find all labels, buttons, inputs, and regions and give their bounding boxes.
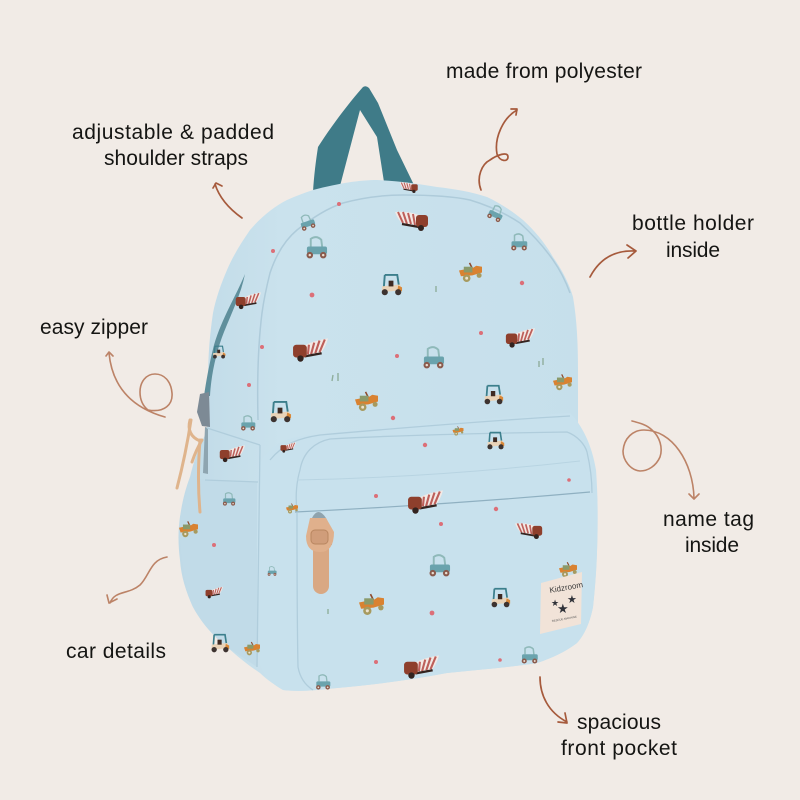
arrow: to polyester — [479, 109, 517, 190]
vehicle print — [179, 183, 577, 690]
brand label: Kidzroom — [549, 580, 584, 595]
label: adjustable and padded shoulder straps: adjustable & padded — [72, 121, 274, 144]
arrow: to front pocket — [540, 677, 567, 723]
label: name tag inside: name tag — [663, 508, 754, 531]
main zipper strip — [204, 274, 245, 396]
label: adjustable and padded shoulder straps — [72, 121, 274, 170]
label: bottle holder inside — [632, 212, 754, 262]
pocket zipper line — [295, 492, 590, 512]
label: bottle holder inside: bottle holder — [632, 212, 754, 235]
front pocket — [257, 413, 598, 691]
label: name tag inside — [663, 508, 754, 557]
backpack illustration — [177, 86, 598, 691]
brand label — [540, 572, 584, 634]
brand label: ★ — [557, 602, 569, 617]
label: easy zipper: easy zipper — [40, 316, 148, 339]
side pocket shading — [180, 477, 257, 667]
side pocket seams — [205, 428, 260, 667]
label: spacious front pocket: front pocket — [561, 737, 677, 760]
brand label: ★ — [551, 599, 559, 609]
label: spacious front pocket — [561, 711, 677, 760]
zipper gap shadow — [203, 427, 208, 474]
print dots — [212, 202, 571, 664]
arrow: to easy zipper — [106, 352, 172, 417]
arrow: to bottle holder — [590, 245, 636, 277]
front pocket seams — [270, 416, 592, 690]
arrow: to car details — [107, 557, 167, 603]
arrow: to name tag — [623, 421, 699, 499]
top carry handle — [313, 86, 414, 192]
zipper pull cords — [177, 420, 202, 512]
main compartment seam — [258, 195, 570, 420]
label: spacious front pocket: spacious — [577, 711, 661, 734]
label: adjustable and padded shoulder straps: shoulder straps — [104, 147, 248, 170]
bag body — [178, 180, 597, 691]
front pocket zipper pull — [306, 512, 334, 594]
label: made from polyester: made from polyester — [446, 60, 642, 83]
arrow: to shoulder straps — [213, 183, 242, 218]
brand label: RESCUE MACHINE — [551, 615, 577, 623]
grass marks — [328, 286, 543, 614]
main zipper slider — [197, 392, 210, 427]
brand label: ★ — [567, 593, 577, 606]
label: name tag inside: inside — [685, 534, 739, 557]
label: bottle holder inside: inside — [666, 239, 720, 262]
label: car details: car details — [66, 640, 166, 663]
